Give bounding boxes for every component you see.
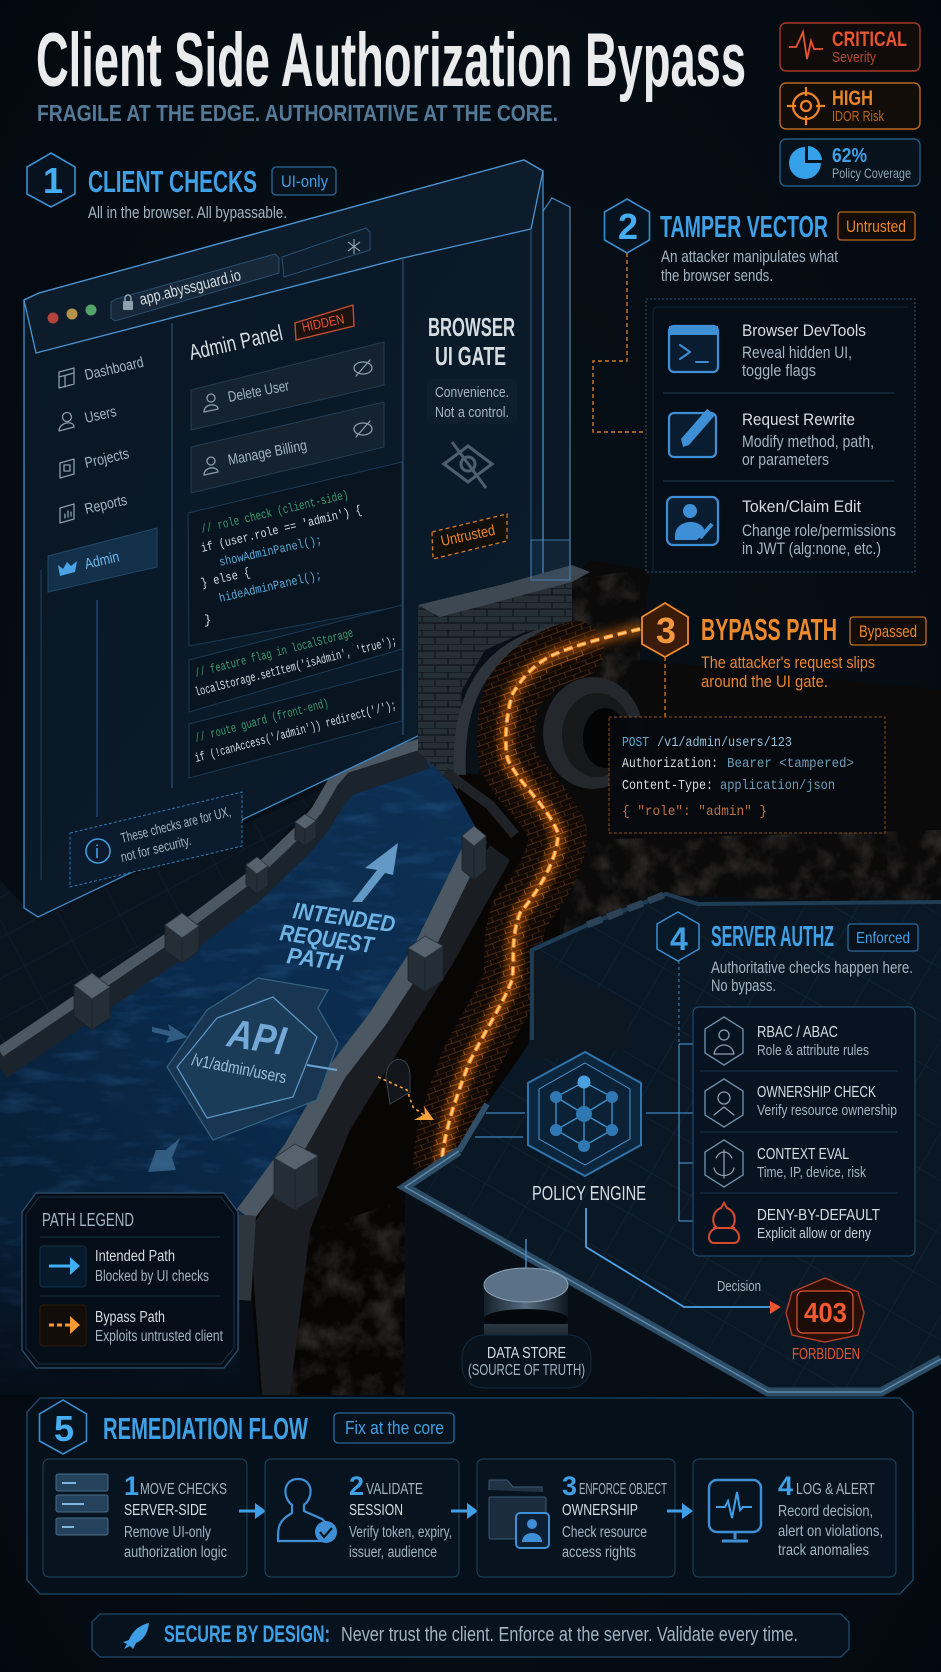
- api gateway hexagon: /v1/admin/users: [190, 1050, 288, 1087]
- section 2 header: the browser sends.: [661, 267, 773, 285]
- step 3 card: 3: [562, 1471, 577, 1501]
- token edit text: in JWT (alg:none, etc.): [742, 540, 881, 558]
- panel: server checks: [693, 1007, 915, 1256]
- window controls: [48, 304, 96, 324]
- badge: policy coverage: Policy Coverage: [832, 165, 911, 181]
- request rewrite text: [742, 410, 874, 469]
- section 4 header: SERVER AUTHZ: [711, 921, 834, 953]
- floor left of channel: [0, 745, 420, 1050]
- devtools text: [742, 321, 866, 380]
- context text: CONTEXT EVAL: [757, 1146, 849, 1163]
- code block: route guard: // route guard (front-end): [193, 697, 330, 746]
- ownership text: [757, 1084, 897, 1119]
- icon: context: [705, 1140, 743, 1187]
- section 2 header: Untrusted: [846, 217, 906, 236]
- subtitle: FRAGILE AT THE EDGE. AUTHORITATIVE AT THE CORE.: [37, 100, 558, 126]
- 403 forbidden: FORBIDDEN: [792, 1346, 860, 1363]
- address bar: app.abyssguard.io: [138, 267, 243, 309]
- badge: critical severity: Severity: [832, 49, 876, 66]
- callout: ux only: i: [95, 842, 99, 862]
- panel: path legend: [22, 1193, 238, 1368]
- manage billing row: Manage Billing: [227, 437, 308, 469]
- rock mass: [470, 560, 941, 950]
- decision arrow: Decision: [717, 1278, 761, 1295]
- section 3 header: Bypassed: [859, 622, 917, 641]
- step 4 card: [693, 1459, 896, 1577]
- request rewrite text: Modify method, path,: [742, 433, 874, 451]
- bricks around bypass path: [442, 650, 575, 1159]
- context text: Time, IP, device, risk: [757, 1165, 867, 1181]
- step 3 card: ENFORCE OBJECT: [579, 1481, 667, 1498]
- api connector: [307, 1065, 337, 1070]
- section 3 header: BYPASS PATH: [701, 612, 837, 647]
- admin panel heading: Admin Panel: [187, 320, 285, 365]
- stone tower and arch: [418, 540, 643, 790]
- section 1 header: 1: [43, 160, 63, 201]
- section 1 header: CLIENT CHECKS: [88, 164, 257, 199]
- step 4 card: alert on violations,: [778, 1523, 883, 1540]
- callout: ux only: These checks are for UX,: [119, 803, 232, 846]
- rbac text: [757, 1024, 869, 1059]
- icon: devtools: [669, 326, 718, 372]
- left stone wall: [0, 742, 426, 1068]
- request callout: Content-Type:: [622, 778, 713, 794]
- ownership text: Verify resource ownership: [757, 1103, 897, 1119]
- intended path label: REQUEST: [278, 919, 377, 958]
- rear browser pane: [531, 198, 570, 600]
- legend: bypass path: [40, 1305, 224, 1346]
- request callout: /v1/admin/users/123: [657, 735, 792, 751]
- code block: route guard: if (!canAccess('/admin')) redirect('/');: [193, 699, 398, 766]
- ownership text: OWNERSHIP CHECK: [757, 1084, 876, 1101]
- intended path label: [278, 897, 397, 976]
- footer banner: [92, 1614, 849, 1657]
- step 2 card: SESSION: [349, 1502, 403, 1519]
- wall pillars: [74, 814, 316, 1030]
- water markers: [148, 1024, 188, 1172]
- section 3 header: [642, 603, 926, 691]
- 403 forbidden: [786, 1278, 864, 1363]
- step 1 card: authorization logic: [124, 1544, 227, 1561]
- deny text: Explicit allow or deny: [757, 1226, 872, 1242]
- intended path label: INTENDED: [291, 897, 397, 937]
- step 1 card: [43, 1459, 247, 1577]
- section 5 header: Fix at the core: [345, 1418, 444, 1438]
- request rewrite text: or parameters: [742, 451, 829, 469]
- badge: high idor risk: IDOR Risk: [832, 108, 884, 125]
- section 1 header: [27, 153, 336, 222]
- intended path arrow: [352, 843, 398, 902]
- footer banner: Never trust the client. Enforce at the server. Validate every time.: [341, 1624, 798, 1646]
- admin panel heading: [187, 305, 354, 365]
- browser ui gate: Untrusted: [439, 522, 497, 550]
- 403 forbidden: 403: [804, 1297, 847, 1328]
- code block: role check: showAdminPanel();: [218, 534, 323, 570]
- browser ui gate: UI GATE: [435, 341, 506, 371]
- step 2 card: [265, 1459, 459, 1577]
- code block: role check: [188, 462, 402, 646]
- section 5 header: 5: [54, 1408, 74, 1449]
- delete user row: Delete User: [227, 377, 291, 406]
- code block: role check: // role check (client-side): [200, 488, 350, 537]
- right stone wall: [240, 826, 510, 1395]
- token edit text: [742, 497, 896, 558]
- rbac text: Role & attribute rules: [757, 1043, 869, 1059]
- legend: intended path: Blocked by UI checks: [95, 1268, 209, 1285]
- browser ui gate: BROWSER: [428, 312, 515, 342]
- legend: intended path: Intended Path: [95, 1248, 175, 1265]
- sidebar nav: Users: [83, 403, 118, 427]
- code block: feature flag: [189, 605, 402, 712]
- rbac text: RBAC / ABAC: [757, 1024, 838, 1041]
- icon: deny: [709, 1203, 739, 1243]
- code block: feature flag: localStorage.setItem('isAdmin', 'true');: [193, 634, 398, 700]
- section 4 header: No bypass.: [711, 977, 776, 995]
- icon: token edit: [667, 497, 718, 545]
- request callout: POST: [622, 735, 649, 751]
- water channel: [0, 750, 480, 1395]
- request callout: Bearer <tampered>: [727, 756, 854, 772]
- section 4 header: Enforced: [856, 930, 910, 947]
- request callout: { "role": "admin" }: [622, 804, 767, 820]
- step 4 card: Record decision,: [778, 1503, 873, 1520]
- data store: (SOURCE OF TRUTH): [468, 1362, 585, 1379]
- code block: role check: } else {: [200, 566, 252, 591]
- step 1 card: Remove UI-only: [124, 1524, 211, 1541]
- tamper connector arrow: [593, 253, 645, 432]
- admin panel heading: HIDDEN: [301, 311, 346, 335]
- token edit text: Change role/permissions: [742, 522, 896, 540]
- devtools text: Browser DevTools: [742, 321, 866, 340]
- token edit text: Token/Claim Edit: [742, 497, 861, 516]
- manage billing row: [191, 402, 384, 493]
- deny text: DENY-BY-DEFAULT: [757, 1207, 880, 1224]
- request callout: Authorization:: [622, 756, 718, 772]
- section 2 header: TAMPER VECTOR: [660, 209, 828, 244]
- request callout: application/json: [720, 778, 835, 794]
- request rewrite text: Request Rewrite: [742, 410, 855, 429]
- step 4 card: track anomalies: [778, 1542, 869, 1559]
- arrow: [667, 1503, 693, 1519]
- browser ui gate: [427, 312, 517, 559]
- step 2 card: 2: [349, 1471, 364, 1501]
- arrow: [451, 1503, 478, 1519]
- request callout: [609, 717, 885, 833]
- step 4 card: 4: [778, 1471, 793, 1501]
- bypass path: [442, 629, 640, 1159]
- legend: intended path: [40, 1246, 209, 1287]
- data store: DATA STORE: [487, 1345, 566, 1362]
- step 1 card: SERVER-SIDE: [124, 1502, 207, 1519]
- api gateway hexagon: [167, 978, 338, 1140]
- panel: tamper vectors: [646, 299, 915, 572]
- badge: high idor risk: [780, 83, 920, 129]
- devtools text: toggle flags: [742, 362, 816, 380]
- legend: bypass path: Exploits untrusted client: [95, 1328, 224, 1345]
- context text: [757, 1146, 867, 1181]
- data store: [462, 1239, 591, 1388]
- badge: critical severity: CRITICAL: [832, 28, 907, 51]
- step 2 card: VALIDATE: [366, 1481, 423, 1498]
- code block: feature flag: // feature flag in localStorage: [193, 627, 355, 681]
- section 1 header: All in the browser. All bypassable.: [88, 204, 287, 222]
- legend: bypass path: Bypass Path: [95, 1309, 165, 1326]
- decision arrow: [586, 1208, 781, 1314]
- callout: ux only: [70, 792, 242, 887]
- intended path label: PATH: [285, 942, 345, 976]
- server platform: [405, 894, 941, 1395]
- policy engine: [528, 1052, 646, 1205]
- api gateway hexagon: API: [224, 1011, 290, 1064]
- step 2 card: issuer, audience: [349, 1544, 437, 1561]
- step 1 card: 1: [124, 1471, 139, 1501]
- section 2 header: [604, 199, 915, 285]
- delete user row: [191, 342, 384, 430]
- step 4 card: LOG & ALERT: [796, 1481, 875, 1498]
- section 1 header: UI-only: [281, 172, 328, 191]
- browser ui gate: Convenience.: [435, 384, 509, 401]
- code block: role check: }: [204, 614, 212, 628]
- sidebar nav: Dashboard: [83, 354, 145, 384]
- callout: ux only: not for security.: [119, 832, 193, 865]
- badge: policy coverage: 62%: [832, 145, 867, 167]
- badge: critical severity: [780, 23, 920, 71]
- section 3 header: around the UI gate.: [701, 673, 828, 691]
- section 4 header: 4: [670, 921, 688, 957]
- address bar: [111, 228, 370, 321]
- section 3 header: 3: [656, 610, 676, 651]
- trench: [245, 772, 560, 1395]
- arrow: [239, 1503, 266, 1519]
- step 3 card: access rights: [562, 1544, 636, 1561]
- badge: policy coverage: [780, 139, 920, 186]
- deny text: [757, 1207, 880, 1242]
- devtools text: Reveal hidden UI,: [742, 344, 852, 362]
- code block: role check: if (user.role == 'admin') {: [200, 503, 363, 556]
- step 3 card: Check resource: [562, 1524, 647, 1541]
- section 2 header: 2: [618, 206, 638, 247]
- panel: path legend: PATH LEGEND: [42, 1210, 134, 1230]
- sidebar nav: [48, 354, 157, 592]
- sidebar nav: Projects: [83, 445, 131, 472]
- panel: remediation flow: [27, 1398, 913, 1594]
- sidebar nav: Reports: [83, 492, 129, 518]
- section 5 header: REMEDIATION FLOW: [103, 1411, 308, 1446]
- code block: role check: hideAdminPanel();: [218, 569, 323, 606]
- badge: high idor risk: HIGH: [832, 87, 873, 110]
- step 3 card: OWNERSHIP: [562, 1502, 638, 1519]
- bypass branch arrow: [378, 1077, 434, 1120]
- browser ui gate: Not a control.: [435, 404, 509, 421]
- icon: pencil: [669, 409, 716, 457]
- water stone edge: [445, 772, 515, 835]
- section 4 header: [657, 912, 918, 995]
- code block: route guard: [189, 669, 402, 778]
- step 2 card: Verify token, expiry,: [349, 1524, 452, 1541]
- policy connectors: [475, 961, 693, 1221]
- section 5 header: [40, 1400, 454, 1454]
- footer banner: SECURE BY DESIGN:: [164, 1621, 330, 1648]
- icon: rocket: [123, 1623, 149, 1649]
- icon: ownership: [705, 1079, 743, 1127]
- panel 1: browser window: [24, 160, 543, 917]
- icon: rbac: [705, 1017, 743, 1065]
- policy engine: POLICY ENGINE: [532, 1183, 646, 1205]
- section 3 header: The attacker's request slips: [701, 654, 875, 672]
- step 3 card: [477, 1459, 675, 1577]
- sidebar nav: Admin: [83, 548, 121, 573]
- step 1 card: MOVE CHECKS: [140, 1481, 227, 1498]
- section 2 header: An attacker manipulates what: [661, 248, 838, 266]
